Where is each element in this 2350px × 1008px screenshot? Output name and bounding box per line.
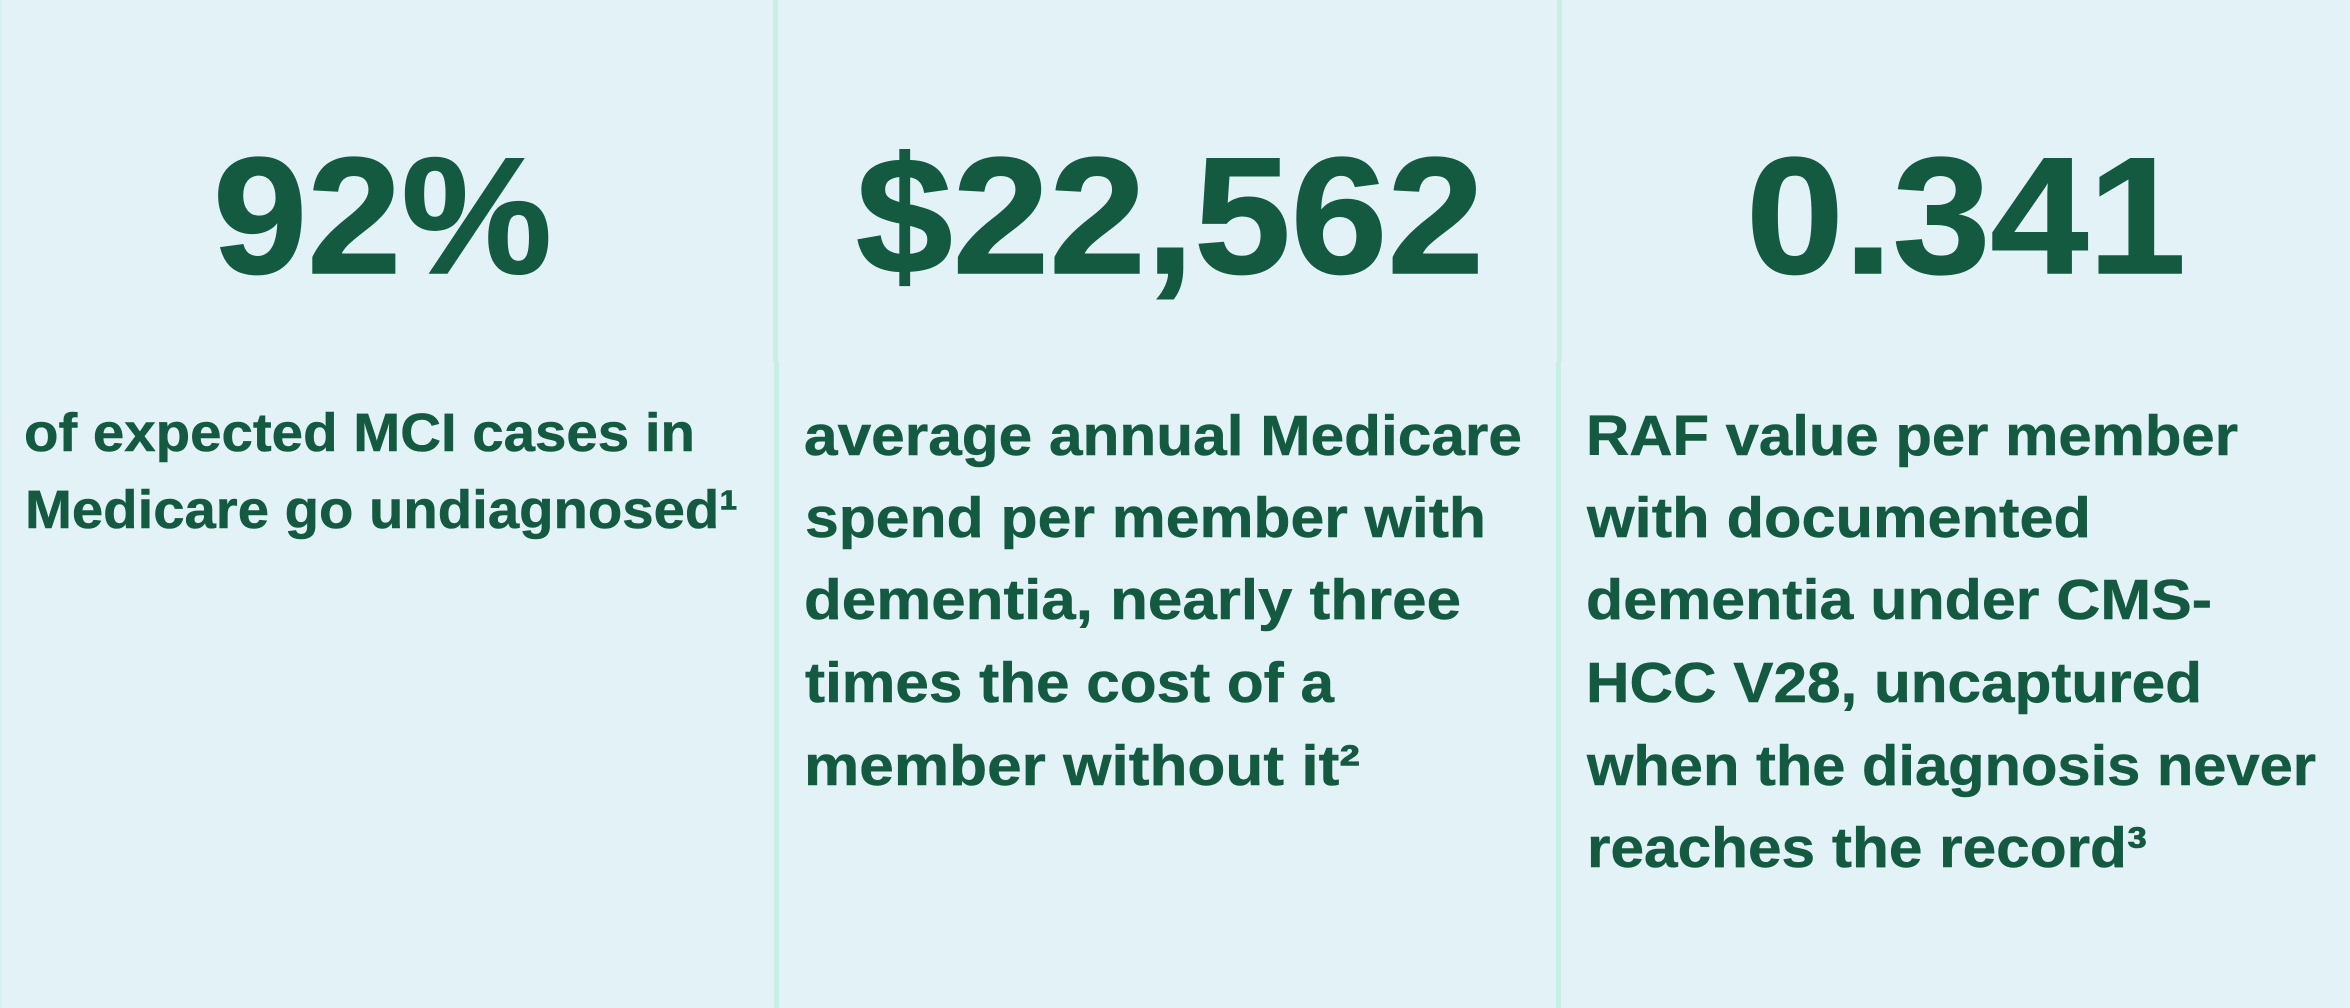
text block: spend description — [804, 404, 1522, 798]
text block: MCI description: Medicare go undiagnosed¹ — [25, 480, 738, 540]
text block: MCI description: of expected MCI cases in — [24, 403, 695, 463]
stat number: 92%: 92% — [213, 124, 552, 309]
text block: spend description: dementia, nearly three — [804, 568, 1461, 632]
text block: RAF description: reaches the record³ — [1587, 816, 2147, 880]
stat number: $22,562: $22,562 — [856, 124, 1484, 309]
text block: RAF description: dementia under CMS- — [1586, 568, 2212, 632]
text block: RAF description: when the diagnosis never — [1586, 734, 2316, 798]
text block: RAF description: RAF value per member — [1586, 404, 2238, 468]
text block: spend description: times the cost of a — [805, 651, 1335, 715]
panel: dementia spend stat — [779, 0, 1556, 1008]
text block: spend description: member without it² — [804, 734, 1360, 798]
text block: spend description: average annual Medicare — [804, 404, 1522, 468]
panel: RAF value stat — [1562, 0, 2350, 1008]
text block: RAF description: HCC V28, uncaptured — [1586, 651, 2202, 715]
text block: RAF description: with documented — [1586, 486, 2091, 550]
text block: spend description: spend per member with — [805, 486, 1486, 550]
text block: MCI description — [24, 403, 738, 540]
text block: RAF description — [1586, 404, 2316, 880]
stat number: 0.341: 0.341 — [1746, 124, 2186, 309]
panel: undiagnosed MCI stat — [2, 0, 773, 1008]
